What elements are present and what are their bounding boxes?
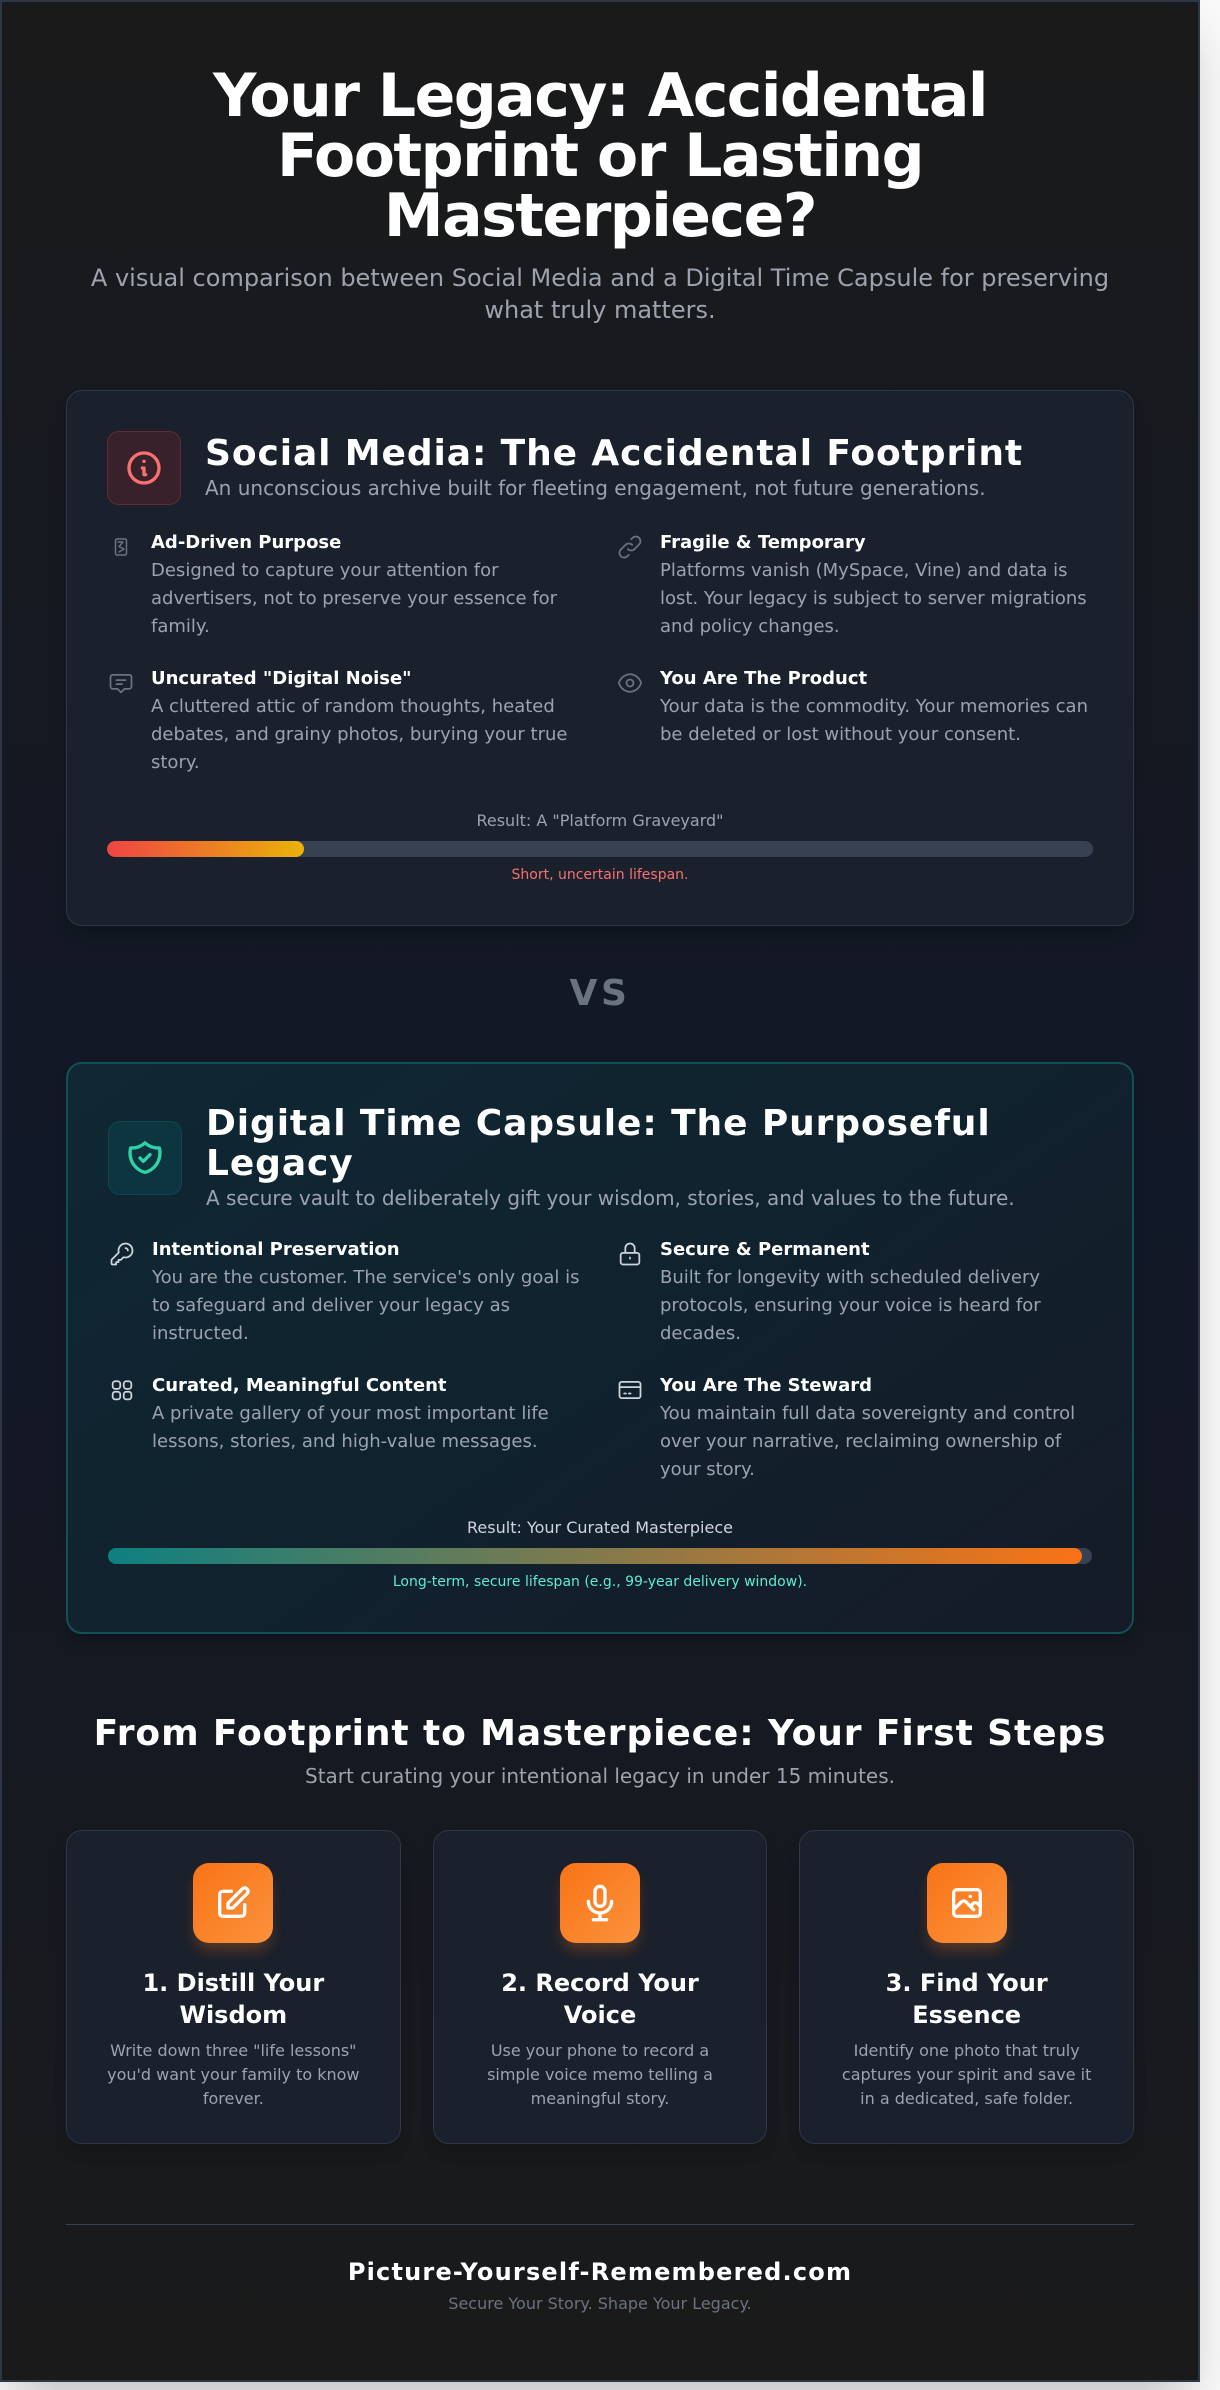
- feature list: digital time capsule: [110, 1239, 1075, 1480]
- footer: [66, 2224, 1134, 2316]
- feature: uncurated digital noise: A cluttered attic of random thoughts, heated debates, and grainy photos, burying your true story.: [151, 696, 567, 773]
- feature: ad-driven purpose: Ad-Driven Purpose: [151, 532, 341, 553]
- subtitle: what truly matters.: [484, 296, 716, 324]
- feature: secure and permanent: Built for longevity with scheduled delivery protocols, ensuring your voice is heard for decades.: [660, 1267, 1041, 1344]
- heading text: digital time capsule: Digital Time Capsule: The Purposeful Legacy: [206, 1103, 991, 1184]
- feature: curated meaningful content: [112, 1375, 549, 1452]
- feature: ad-driven purpose: [114, 532, 557, 637]
- section subheading: Start curating your intentional legacy in under 15 minutes.: [305, 1764, 895, 1788]
- feature: uncurated digital noise: [110, 668, 567, 773]
- panel heading: social media: [107, 431, 1023, 505]
- feature: you are the steward: You Are The Steward: [660, 1375, 872, 1396]
- lifespan note: Long-term, secure lifespan (e.g., 99-year delivery window).: [393, 1574, 807, 1590]
- panel heading: digital time capsule: [108, 1103, 1015, 1210]
- section: first steps: [94, 1713, 1106, 1788]
- feature: fragile and temporary: [618, 532, 1087, 637]
- subtitle: [91, 264, 1109, 324]
- result label: Result: Your Curated Masterpiece: [467, 1518, 733, 1537]
- step 1 text: Write down three "life lessons" you'd want your family to know forever.: [107, 2041, 360, 2108]
- step cards: [66, 1830, 1134, 2144]
- heading text: social media: An unconscious archive built for fleeting engagement, not future generations.: [205, 476, 986, 500]
- feature: secure and permanent: Secure & Permanent: [660, 1239, 870, 1260]
- header: [91, 61, 1109, 324]
- feature: fragile and temporary: Fragile & Temporary: [660, 532, 866, 553]
- footer brand: Picture-Yourself-Remembered.com: [348, 2258, 852, 2286]
- step 3 text: Identify one photo that truly captures your spirit and save it in a dedicated, safe folder.: [842, 2041, 1091, 2108]
- title: Footprint or Lasting: [277, 121, 923, 191]
- feature: you are the steward: You maintain full data sovereignty and control over your narrative, reclaiming ownership of your story.: [660, 1403, 1075, 1480]
- icon: info warning: [107, 431, 181, 505]
- title: Your Legacy: Accidental: [213, 61, 987, 131]
- result meter: platform graveyard: [107, 811, 1093, 883]
- step 3 title: 3. Find Your Essence: [886, 1969, 1048, 2029]
- feature: uncurated digital noise: Uncurated "Digital Noise": [151, 668, 412, 689]
- icon: shield check: [108, 1121, 182, 1195]
- heading text: social media: Social Media: The Accidental Footprint: [205, 433, 1023, 474]
- vs divider: VS: [570, 973, 630, 1014]
- panel: digital time capsule: [66, 1062, 1134, 1634]
- lifespan note: Short, uncertain lifespan.: [512, 867, 688, 883]
- feature: fragile and temporary: Platforms vanish (MySpace, Vine) and data is lost. Your legacy is subject to server migrations and policy changes.: [660, 560, 1087, 637]
- lifespan bar: short: [107, 841, 1093, 857]
- feature: curated meaningful content: A private gallery of your most important life lessons, stories, and high-value messages.: [152, 1403, 549, 1452]
- feature: intentional preservation: Intentional Preservation: [152, 1239, 400, 1260]
- feature: intentional preservation: You are the customer. The service's only goal is to safeguard and deliver your legacy as instructed.: [152, 1267, 579, 1344]
- step card 3: [799, 1830, 1134, 2144]
- heading text: digital time capsule: A secure vault to deliberately gift your wisdom, stories, and values to the future.: [206, 1186, 1015, 1210]
- step 2 text: Use your phone to record a simple voice memo telling a meaningful story.: [487, 2041, 713, 2108]
- feature: curated meaningful content: Curated, Meaningful Content: [152, 1375, 447, 1396]
- feature: you are the product: You Are The Product: [660, 668, 867, 689]
- heading text: social media: [205, 433, 1023, 500]
- title: Masterpiece?: [384, 181, 816, 251]
- feature: you are the steward: [618, 1375, 1075, 1480]
- step card 1: [66, 1830, 401, 2144]
- panel: social media: [66, 390, 1134, 926]
- title: [212, 61, 987, 251]
- result label: Result: A "Platform Graveyard": [476, 811, 724, 830]
- feature: secure and permanent: [620, 1239, 1041, 1344]
- feature list: social media: [110, 532, 1088, 773]
- feature: you are the product: Your data is the commodity. Your memories can be deleted or lost without your consent.: [660, 696, 1088, 745]
- feature: you are the product: [618, 668, 1088, 745]
- section heading: From Footprint to Masterpiece: Your First Steps: [94, 1713, 1106, 1754]
- feature: ad-driven purpose: Designed to capture your attention for advertisers, not to preserve your essence for family.: [151, 560, 557, 637]
- feature: intentional preservation: [110, 1239, 579, 1344]
- footer tagline: Secure Your Story. Shape Your Legacy.: [448, 2294, 752, 2313]
- icon: pencil: [193, 1863, 273, 1943]
- subtitle: A visual comparison between Social Media and a Digital Time Capsule for preserving: [91, 264, 1109, 292]
- step card 2: [433, 1830, 767, 2144]
- lifespan bar: long: [108, 1548, 1092, 1564]
- icon: microphone: [560, 1863, 640, 1943]
- icon: photo: [927, 1863, 1007, 1943]
- result meter: curated masterpiece: [108, 1518, 1092, 1590]
- step 1 title: 1. Distill Your Wisdom: [142, 1969, 324, 2029]
- step 2 title: 2. Record Your Voice: [501, 1969, 699, 2029]
